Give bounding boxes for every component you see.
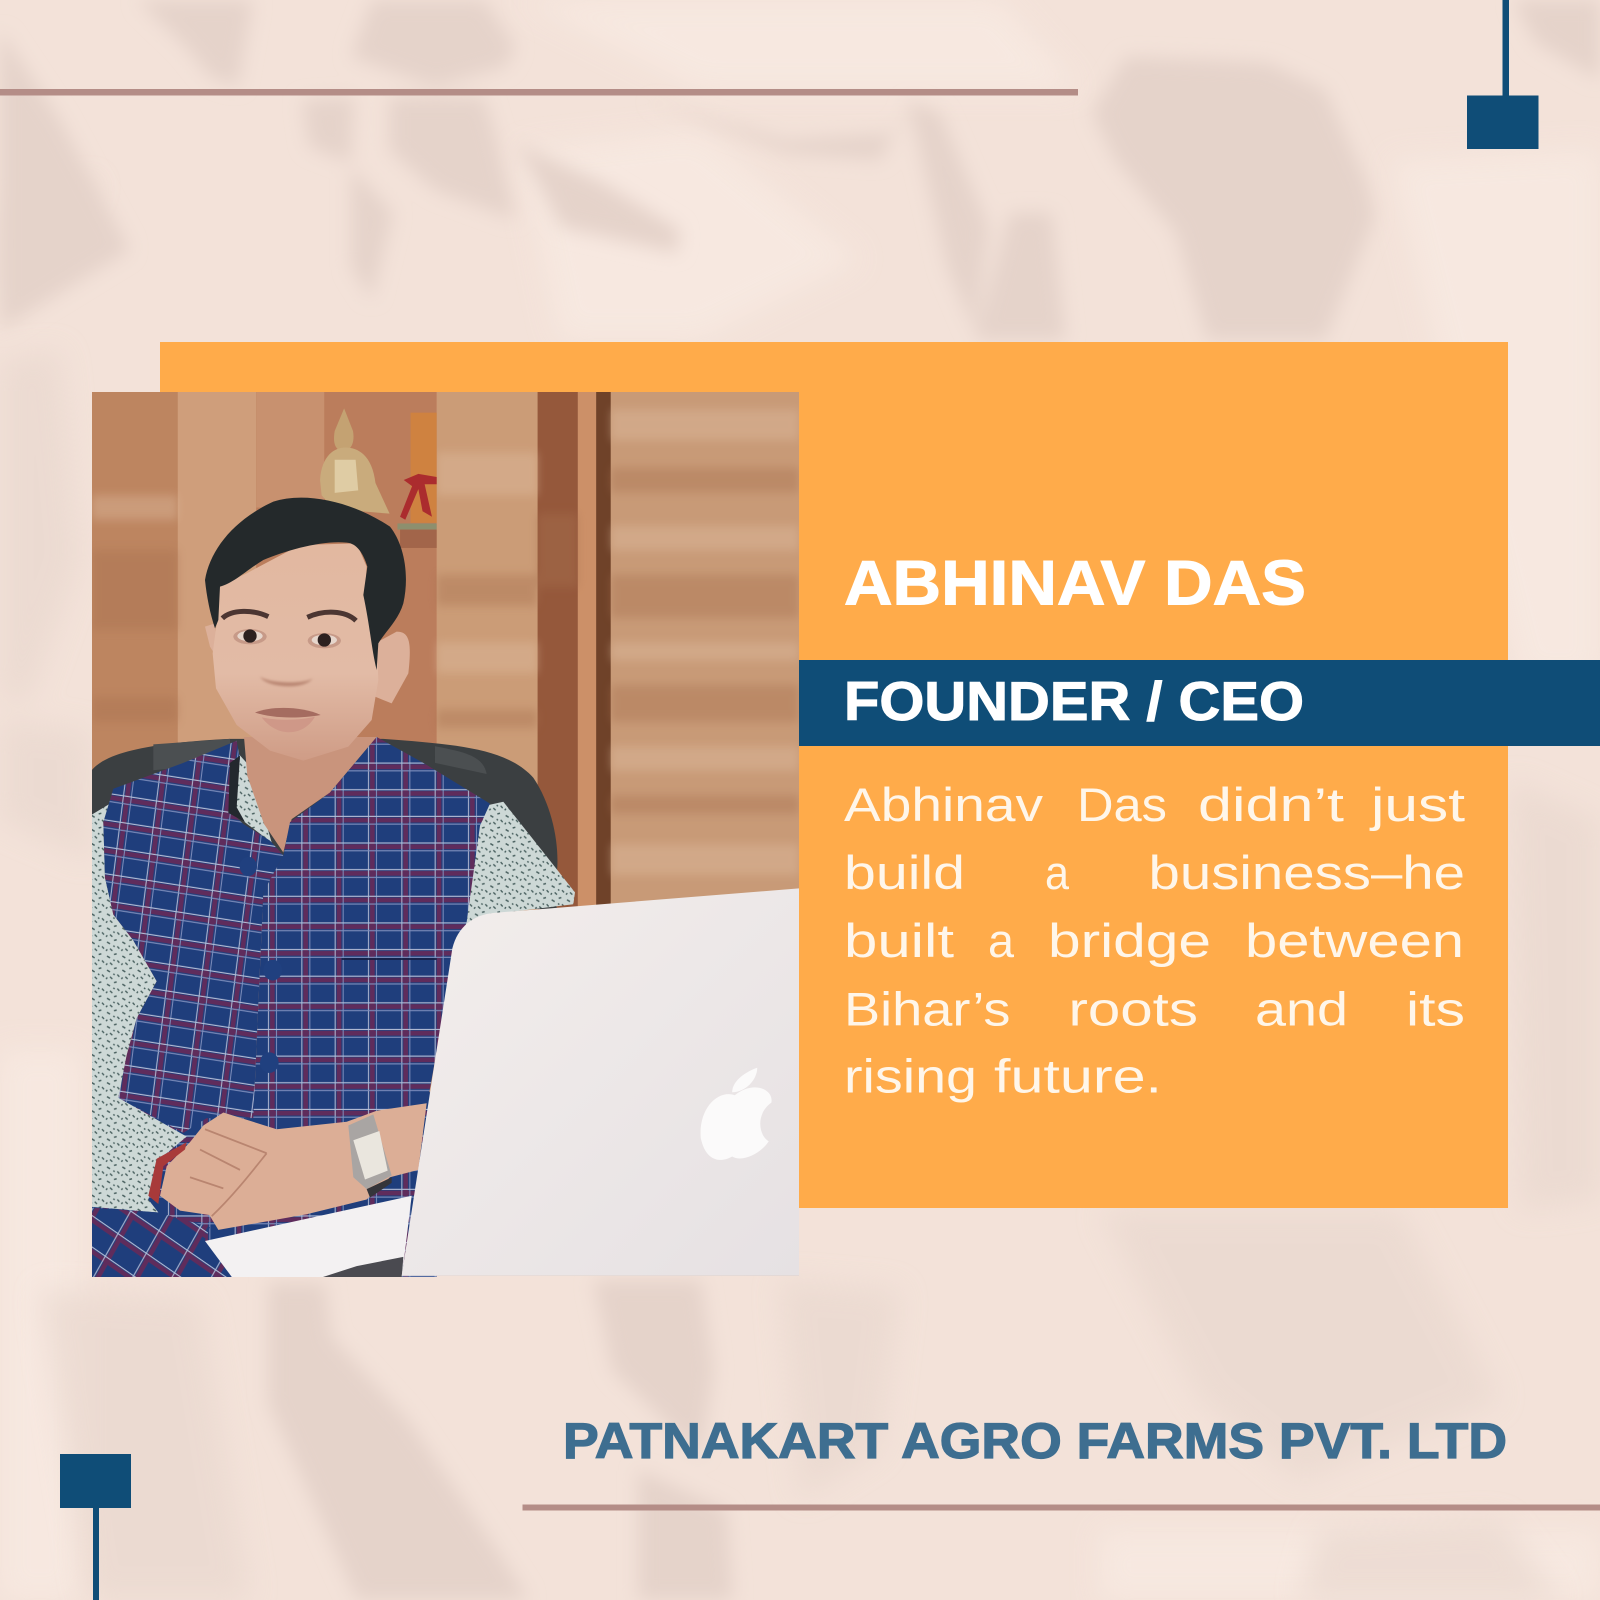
text block: biography: roots	[1068, 982, 1198, 1036]
photo: laptop base and keyboard	[205, 1196, 412, 1279]
heading: name: ABHINAV DAS	[844, 548, 1306, 618]
text block: biography: business–he	[1148, 846, 1465, 899]
photo: gift box	[397, 413, 437, 548]
decoration: bottom left square with stem	[60, 1454, 131, 1600]
text block: biography: Abhinav	[844, 778, 1044, 831]
bottom divider line	[522, 1504, 1600, 1510]
photo: office chair	[92, 739, 557, 909]
photo: neck	[244, 737, 377, 852]
text block: biography: future.	[994, 1050, 1162, 1102]
text block: biography: Bihar’s	[844, 982, 1010, 1036]
photo: trousers	[92, 1208, 233, 1279]
photo: buddha statue	[320, 408, 390, 514]
photo: apple logo	[701, 1068, 772, 1160]
text block: biography: just	[1368, 778, 1465, 831]
text block: biography: its	[1406, 982, 1465, 1036]
orange panel	[160, 342, 1508, 1208]
photo: man, torso and hands	[90, 737, 575, 1281]
photo: ears	[205, 623, 410, 703]
top divider line	[0, 89, 1078, 96]
photo: founder at desk	[90, 391, 799, 1281]
text block: biography: didn’t	[1198, 778, 1344, 831]
photo: checked vest	[103, 737, 490, 1133]
photo: face	[213, 543, 378, 761]
photo: lap backing plaid	[90, 1092, 437, 1281]
navy title band	[799, 660, 1600, 746]
text block: biography: Das	[1077, 778, 1167, 831]
decoration: top right square with stem	[1467, 0, 1538, 149]
text block: biography: and	[1255, 982, 1348, 1036]
photo: nose	[260, 677, 313, 686]
text block: biography: between	[1245, 914, 1464, 967]
text block: biography: built	[844, 914, 954, 967]
photo: eyes	[233, 629, 341, 648]
heading: role: FOUNDER / CEO	[844, 670, 1304, 732]
text block: biography	[844, 778, 1465, 1102]
text block: biography: rising	[844, 1050, 977, 1102]
text block: biography: a	[988, 914, 1015, 967]
photo: mouth	[255, 708, 321, 732]
text block: biography: bridge	[1048, 914, 1211, 967]
photo: eyebrows	[222, 611, 356, 621]
photo: hair	[205, 498, 406, 670]
photo: man's head	[205, 498, 410, 761]
photo: laptop lid	[402, 888, 799, 1276]
photo: wristwatch	[348, 1114, 392, 1198]
text block: biography: a	[1045, 846, 1070, 899]
text block: biography: build	[844, 846, 965, 899]
photo: wood wall and statue shelf	[92, 391, 799, 1276]
photo: clasped hands	[148, 1103, 427, 1230]
company name: PATNAKART AGRO FARMS PVT. LTD	[563, 1413, 1507, 1469]
photo: shirt	[92, 752, 575, 1212]
